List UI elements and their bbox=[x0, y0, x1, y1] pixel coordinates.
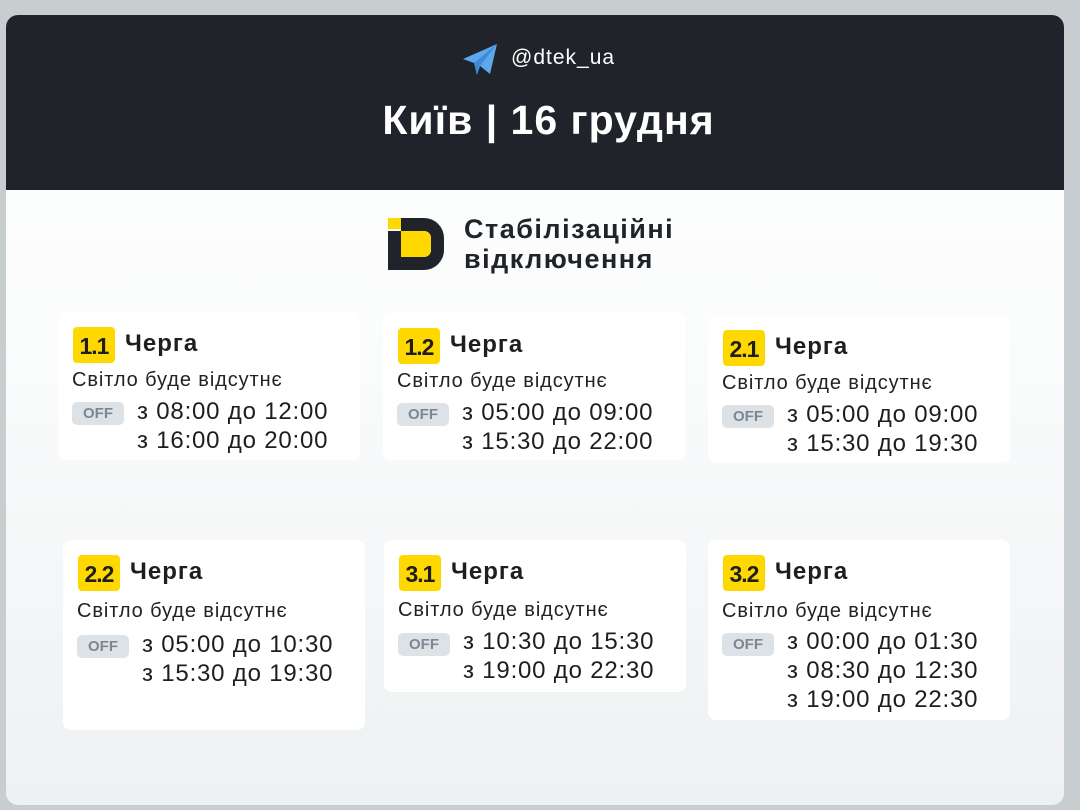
card 3.2: 3.2 bbox=[730, 561, 758, 587]
card 2.2: Черга bbox=[130, 558, 203, 585]
card 1.2: OFF bbox=[408, 406, 438, 423]
card 3.1: з 19:00 до 22:30 bbox=[463, 657, 654, 684]
card 3.1: з 10:30 до 15:30 bbox=[463, 628, 654, 655]
card 3.1: Світло буде відсутнє bbox=[398, 599, 609, 621]
card 2.1: з 15:30 до 19:30 bbox=[787, 430, 978, 457]
card 2.2: 2.2 bbox=[84, 561, 113, 587]
card 3.1: OFF bbox=[409, 636, 439, 653]
card 1.1: 1.1 bbox=[80, 333, 108, 359]
card 2.2: OFF bbox=[88, 638, 118, 655]
card 3.1: Черга bbox=[451, 558, 524, 585]
card 1.1: Черга bbox=[125, 330, 198, 357]
card 2.1: з 05:00 до 09:00 bbox=[787, 401, 978, 428]
card 2.2 bbox=[63, 540, 365, 730]
header bbox=[6, 15, 1064, 190]
card 1.2: 1.2 bbox=[404, 334, 433, 360]
card 3.2: з 00:00 до 01:30 bbox=[787, 628, 978, 655]
card 1.2: з 05:00 до 09:00 bbox=[462, 399, 653, 426]
card 2.2: з 15:30 до 19:30 bbox=[142, 660, 333, 687]
subtitle: Стабілізаційні bbox=[464, 214, 674, 244]
logo bbox=[388, 218, 444, 270]
card 2.1: 2.1 bbox=[730, 336, 758, 362]
icon: telegram bbox=[463, 44, 497, 75]
subtitle bbox=[464, 214, 674, 274]
handle: @dtek_ua bbox=[511, 46, 615, 69]
card 1.2: Світло буде відсутнє bbox=[397, 370, 608, 392]
card 3.1: 3.1 bbox=[406, 561, 434, 587]
card 3.2 bbox=[708, 540, 1010, 720]
card 3.2: з 19:00 до 22:30 bbox=[787, 686, 978, 713]
card 1.1 bbox=[58, 312, 360, 460]
card 2.1 bbox=[708, 315, 1010, 463]
card 1.1: з 16:00 до 20:00 bbox=[137, 427, 328, 454]
card 3.2: OFF bbox=[733, 636, 763, 653]
card 2.2: Світло буде відсутнє bbox=[77, 600, 288, 622]
card 3.1 bbox=[384, 540, 686, 692]
card 1.2: Черга bbox=[450, 331, 523, 358]
title: Київ | 16 грудня bbox=[382, 97, 715, 143]
card 2.1: OFF bbox=[733, 408, 763, 425]
card 1.1: OFF bbox=[83, 405, 113, 422]
card 2.1: Світло буде відсутнє bbox=[722, 372, 933, 394]
card 1.2: з 15:30 до 22:00 bbox=[462, 428, 653, 455]
card 1.2 bbox=[383, 313, 685, 460]
card 1.1: Світло буде відсутнє bbox=[72, 369, 283, 391]
card 2.1: Черга bbox=[775, 333, 848, 360]
card 1.1: з 08:00 до 12:00 bbox=[137, 398, 328, 425]
card 2.2: з 05:00 до 10:30 bbox=[142, 631, 333, 658]
subtitle: відключення bbox=[464, 244, 654, 274]
card 3.2: з 08:30 до 12:30 bbox=[787, 657, 978, 684]
card 3.2: Черга bbox=[775, 558, 848, 585]
card 3.2: Світло буде відсутнє bbox=[722, 600, 933, 622]
